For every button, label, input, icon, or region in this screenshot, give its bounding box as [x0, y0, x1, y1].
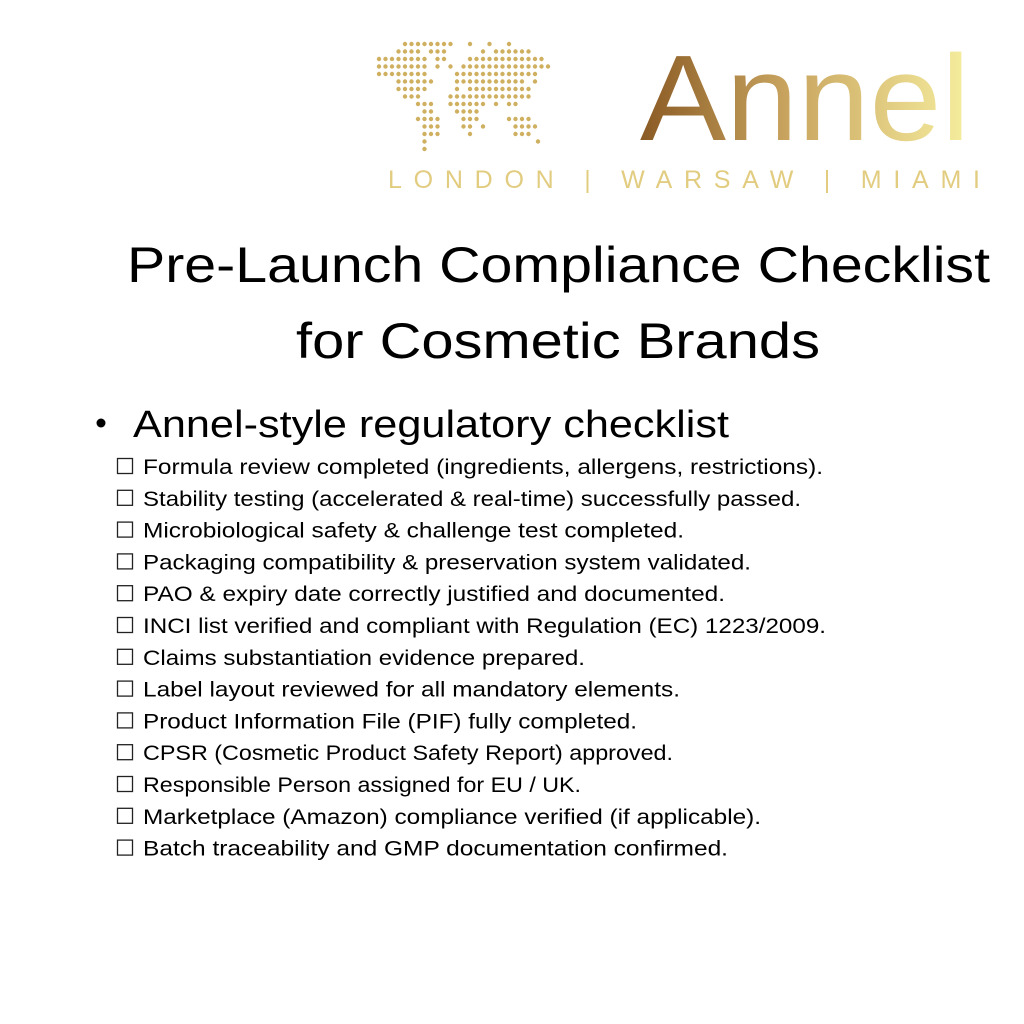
checklist: Formula review completed (ingredients, allergens, restrictions).: [143, 456, 823, 479]
checklist: INCI list verified and compliant with Regulation (EC) 1223/2009.: [143, 615, 826, 638]
checklist: Product Information File (PIF) fully completed.: [143, 710, 637, 733]
title: [127, 237, 990, 369]
checklist: Batch traceability and GMP documentation confirmed.: [143, 838, 728, 861]
checklist: Claims substantiation evidence prepared.: [143, 647, 585, 670]
checklist: Responsible Person assigned for EU / UK.: [143, 774, 581, 797]
logo: [377, 30, 980, 194]
locations tagline: LONDON | WARSAW | MIAMI: [388, 166, 980, 194]
checklist: Label layout reviewed for all mandatory elements.: [143, 679, 680, 702]
checklist: PAO & expiry date correctly justified and documented.: [143, 583, 725, 606]
checklist: Stability testing (accelerated & real-time) successfully passed.: [143, 488, 801, 511]
checklist: Marketplace (Amazon) compliance verified (if applicable).: [143, 806, 761, 829]
checkbox boxes: [118, 458, 132, 855]
checklist: Packaging compatibility & preservation system validated.: [143, 551, 751, 574]
checklist: Microbiological safety & challenge test completed.: [143, 520, 684, 543]
subheading bullet: Annel-style regulatory checklist: [133, 404, 730, 446]
checklist: CPSR (Cosmetic Product Safety Report) approved.: [143, 742, 673, 765]
title: for Cosmetic Brands: [296, 313, 820, 369]
title: Pre-Launch Compliance Checklist: [127, 237, 990, 293]
icon: dotted world map: [377, 42, 550, 151]
checklist: [118, 456, 826, 861]
brand name: Annel: [640, 30, 970, 166]
